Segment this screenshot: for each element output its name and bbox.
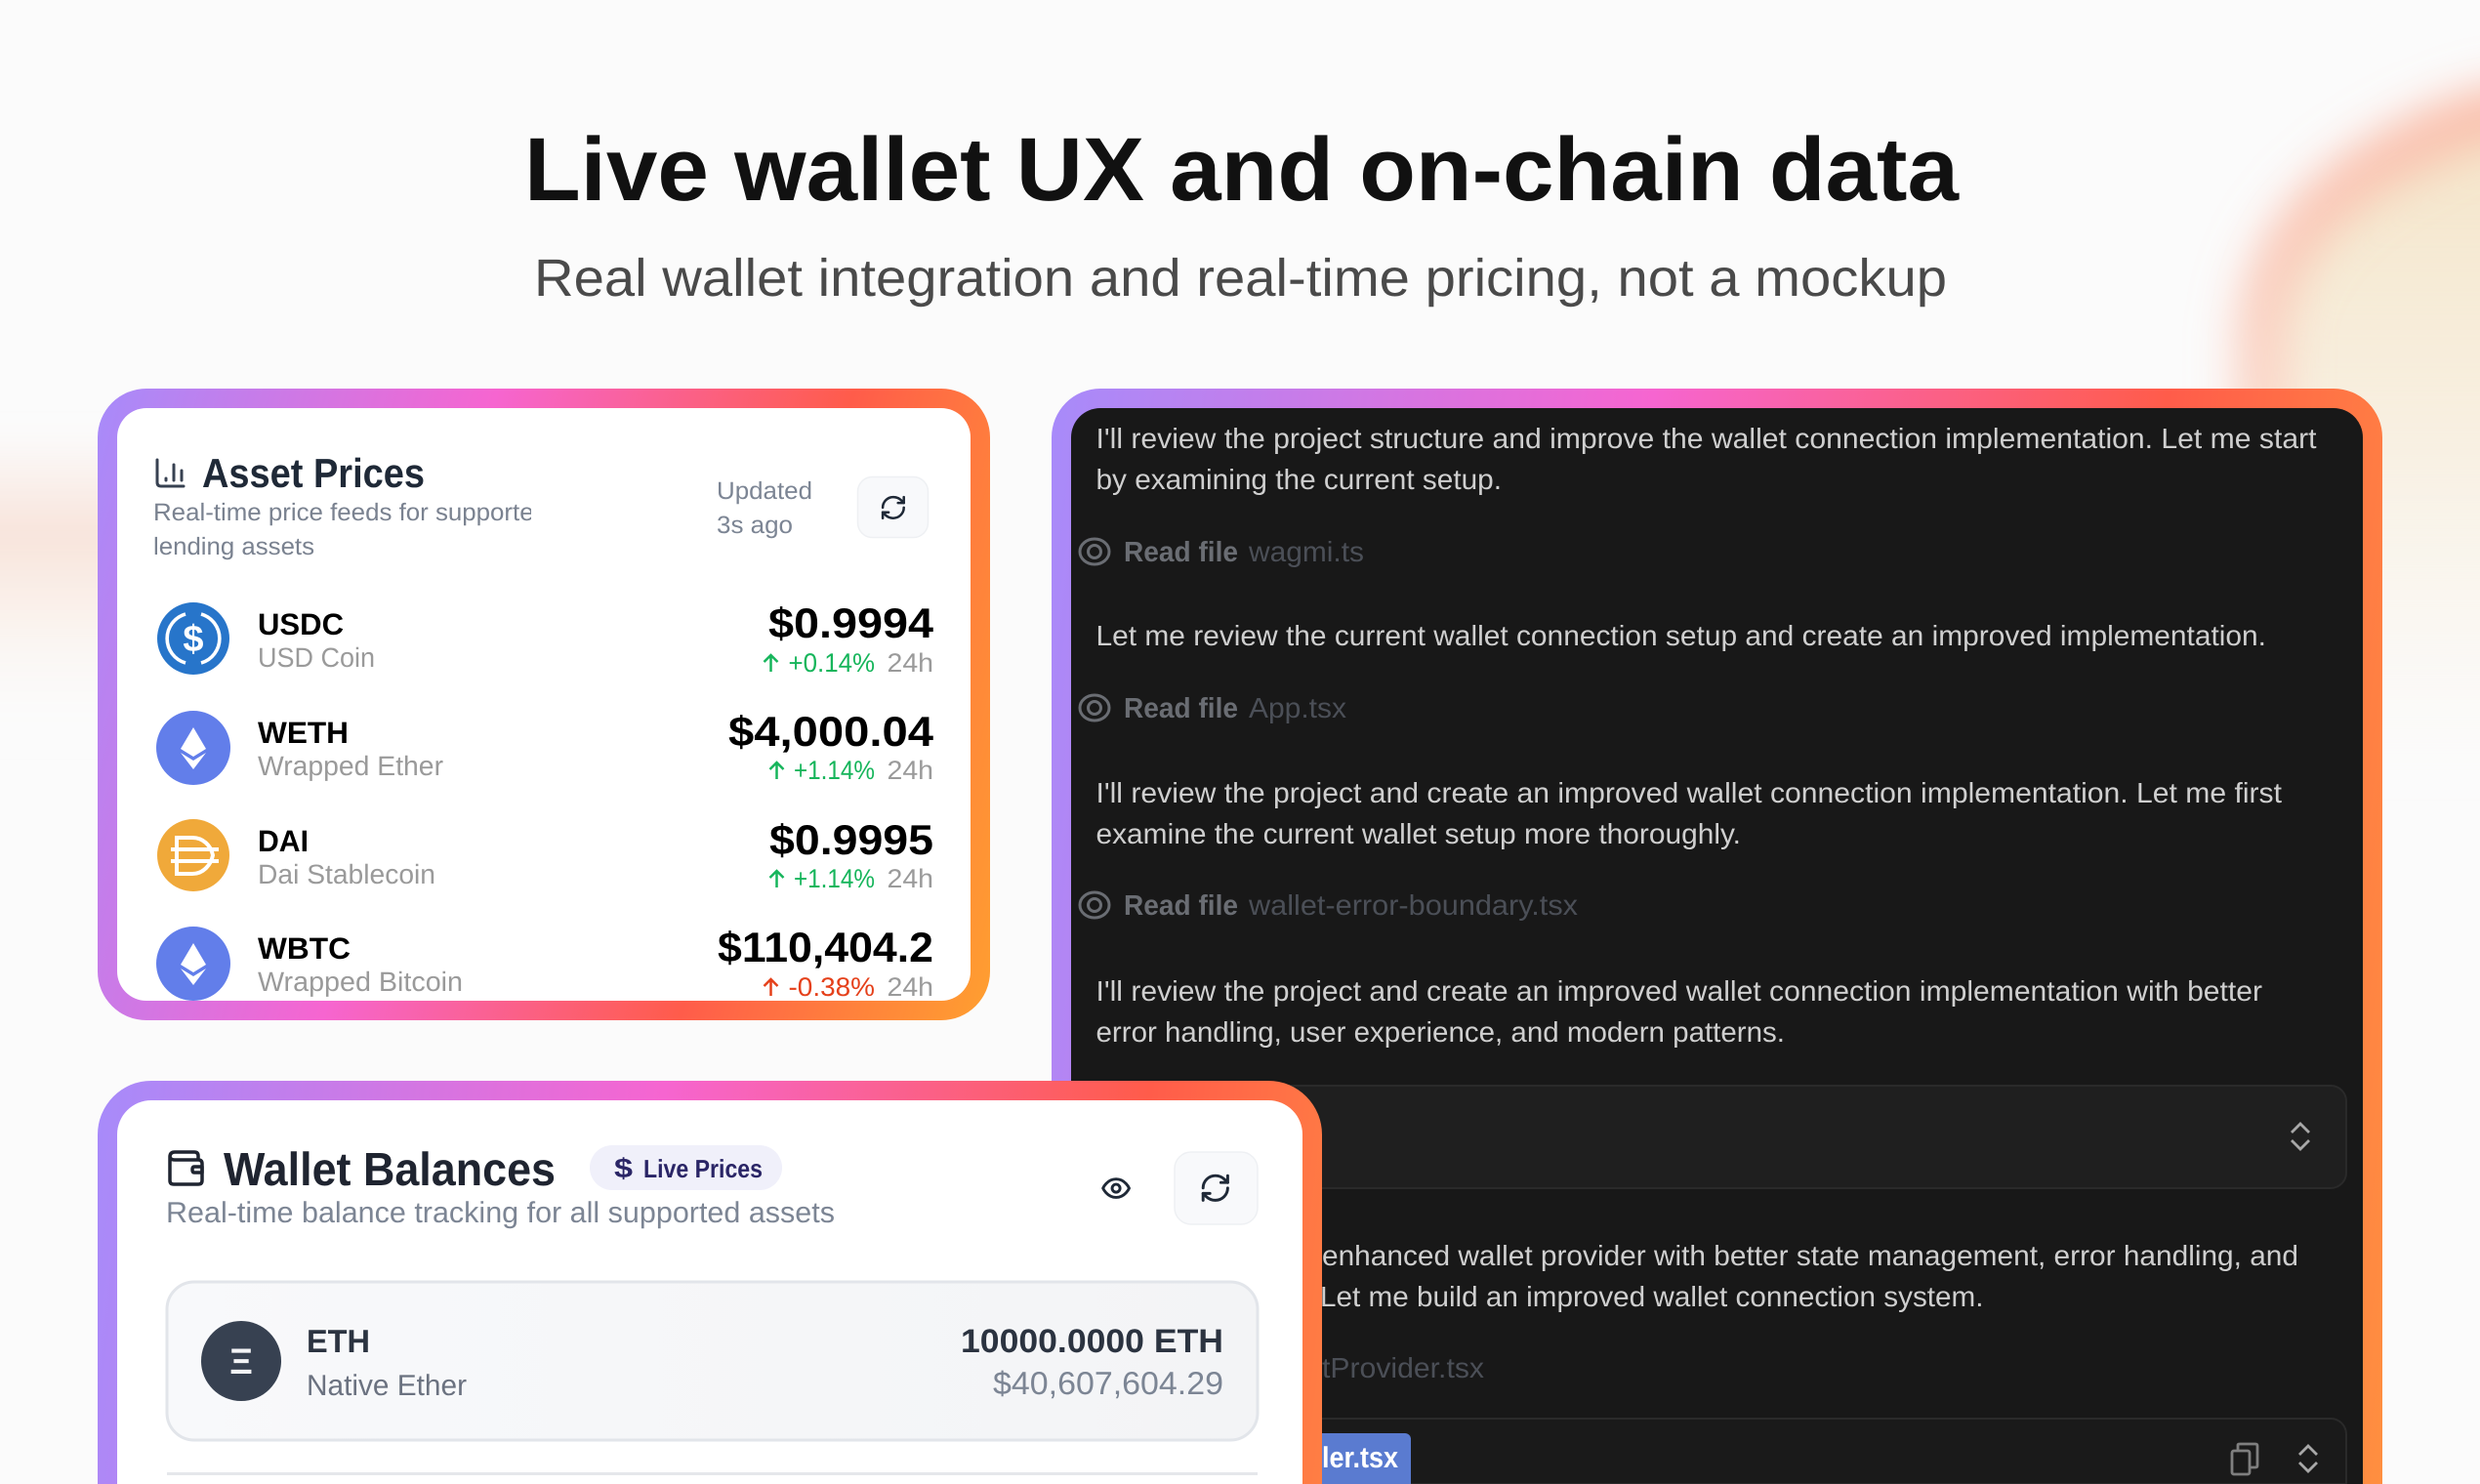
file chip — [1269, 1433, 1411, 1484]
row: USDC — [157, 600, 933, 678]
row: USDC: +0.14% — [789, 648, 875, 678]
read file: wagmi.ts: Read file — [1124, 537, 1238, 568]
subtitle: Real wallet integration and real-time pricing, not a mockup — [534, 249, 1947, 308]
row: USDC: 24h — [887, 648, 933, 678]
read file: App.tsx: Read file — [1124, 693, 1238, 724]
refresh button — [1175, 1152, 1258, 1224]
log text blocks: error handling, user experience, and modern patterns. — [1095, 1017, 1785, 1049]
asset list — [156, 600, 933, 1002]
icon: DAI — [157, 819, 229, 891]
balance row: ETH: 10000.0000 ETH — [961, 1323, 1223, 1360]
asset prices header — [153, 450, 928, 560]
row: WETH — [156, 709, 933, 785]
row: DAI: DAI — [258, 824, 309, 858]
balance row: ETH: Native Ether — [307, 1370, 467, 1402]
log text blocks: examine the current wallet setup more thoroughly. — [1095, 819, 1741, 850]
row: USDC: USD Coin — [258, 642, 375, 673]
row: WETH: $4,000.04 — [728, 709, 933, 756]
open code block — [1269, 1419, 2346, 1484]
icon: chevrons — [2299, 1446, 2317, 1471]
row: WBTC: WBTC — [258, 931, 351, 966]
icon: WBTC — [156, 927, 230, 1001]
icon: WETH — [156, 711, 230, 785]
read file: App.tsx — [1080, 693, 1347, 724]
read file: App.tsx: App.tsx — [1249, 693, 1347, 724]
file chip: ler.tsx — [1322, 1442, 1398, 1474]
row: DAI — [157, 817, 933, 893]
icon: USDC: $ — [183, 619, 204, 660]
description: Real-time price feeds for supported — [153, 499, 548, 526]
icon: bar chart — [157, 460, 184, 486]
row: DAI: +1.14% — [794, 864, 875, 893]
icon: copy — [2232, 1444, 2257, 1474]
row: WETH: WETH — [258, 716, 349, 750]
icon: chevrons — [2292, 1124, 2309, 1149]
balance row: ETH — [167, 1282, 1258, 1440]
updated time: Updated — [717, 477, 812, 505]
updated time — [717, 477, 812, 539]
icon: wallet — [170, 1152, 202, 1184]
badge: live prices: $ — [614, 1153, 634, 1183]
read file: wagmi.ts — [1080, 537, 1364, 568]
row: WBTC: Wrapped Bitcoin — [258, 967, 463, 997]
row: WBTC: 24h — [887, 972, 933, 1002]
background glow: left — [0, 430, 947, 742]
refresh button — [857, 476, 928, 537]
updated time: 3s ago — [717, 512, 793, 539]
row: USDC: USDC — [258, 607, 344, 641]
row: WETH: 24h — [887, 756, 933, 785]
row: WBTC: -0.38% — [789, 972, 875, 1002]
badge: live prices: Live Prices — [643, 1154, 763, 1183]
heading: wallet balances: Wallet Balances — [224, 1144, 556, 1196]
description: lending assets — [153, 533, 314, 560]
log text blocks — [1095, 424, 2316, 1313]
icon: ETH token — [201, 1321, 281, 1401]
read file: wallet-error-boundary.tsx — [1080, 890, 1579, 922]
description: Real-time balance tracking for all supported assets — [166, 1197, 835, 1229]
row: USDC: $0.9994 — [768, 600, 933, 647]
row: DAI: Dai Stablecoin — [258, 859, 435, 889]
log text blocks: I'll review the project and create an improved wallet connection implementation. Let me first — [1095, 778, 2282, 809]
log text blocks: enhanced wallet provider with better state management, error handling, and — [1322, 1241, 2298, 1272]
row: WBTC: $110,404.2 — [718, 925, 933, 971]
log text blocks: Let me review the current wallet connection setup and create an improved implementation. — [1095, 621, 2266, 652]
heading: asset prices: Asset Prices — [202, 450, 425, 496]
badge: live prices — [590, 1145, 782, 1190]
row: WETH: +1.14% — [794, 756, 875, 785]
read file: provider: tProvider.tsx — [1322, 1353, 1485, 1384]
background glow: right — [2260, 98, 2480, 781]
log text blocks: Let me build an improved wallet connection system. — [1320, 1282, 1984, 1313]
row: DAI: $0.9995 — [769, 817, 933, 864]
panel: assistant log — [1052, 389, 2382, 1484]
collapsed code block — [1269, 1086, 2346, 1188]
panel: asset prices — [98, 389, 990, 1020]
description — [154, 502, 531, 560]
read file: wallet-error-boundary.tsx: Read file — [1124, 890, 1238, 922]
icon: ETH token: Ξ — [229, 1341, 253, 1381]
read file: wallet-error-boundary.tsx: wallet-error-boundary.tsx — [1248, 890, 1579, 922]
row: WBTC — [156, 925, 933, 1002]
icon: USDC — [157, 602, 229, 675]
log text blocks: I'll review the project structure and improve the wallet connection implementation. Let me start — [1095, 424, 2316, 455]
row: DAI: 24h — [887, 864, 933, 893]
balance row: ETH: ETH — [307, 1323, 370, 1359]
title: Live wallet UX and on-chain data — [524, 120, 1960, 220]
log text blocks: by examining the current setup. — [1095, 465, 1502, 496]
panel: wallet balances — [98, 1081, 1322, 1484]
row: WETH: Wrapped Ether — [258, 751, 443, 781]
read file: wagmi.ts: wagmi.ts — [1248, 537, 1364, 568]
log text blocks: I'll review the project and create an improved wallet connection implementation with better — [1095, 976, 2262, 1008]
balance row: ETH: $40,607,604.29 — [993, 1365, 1223, 1401]
icon: eye — [1103, 1179, 1129, 1197]
